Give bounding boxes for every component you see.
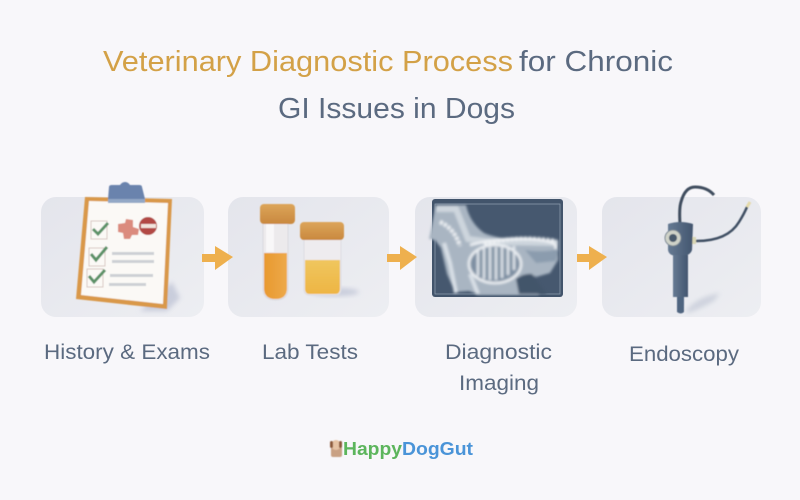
label: endoscopy: Endoscopy [629,343,740,366]
panel: diagnostic imaging [415,197,577,317]
logo: HappyDogGut [330,439,473,459]
icon: clipboard [76,182,180,311]
logo: HappyDogGut: Happy [343,439,402,459]
title: Veterinary Diagnostic Process [103,46,513,78]
label: lab tests: Lab Tests [262,341,358,364]
panel: endoscopy [602,187,761,317]
icon: endoscope [665,187,750,314]
label: diagnostic imaging: Diagnostic [445,341,552,364]
icon: sample tube and jar [260,204,359,300]
title: for Chronic [519,46,673,78]
title: GI Issues in Dogs [278,93,515,125]
icon: dog [330,440,342,457]
icon: x-ray film [429,199,563,297]
title [103,46,673,125]
label: diagnostic imaging: Imaging [459,372,539,395]
arrow: lab tests to imaging [387,246,417,270]
panel: lab tests [228,197,389,317]
panel: history and exams [41,182,204,317]
arrow: imaging to endoscopy [577,246,607,270]
arrow: history to lab tests [202,246,233,270]
label: diagnostic imaging [445,341,552,395]
logo: HappyDogGut: DogGut [402,439,473,459]
label: history and exams: History & Exams [44,341,210,364]
